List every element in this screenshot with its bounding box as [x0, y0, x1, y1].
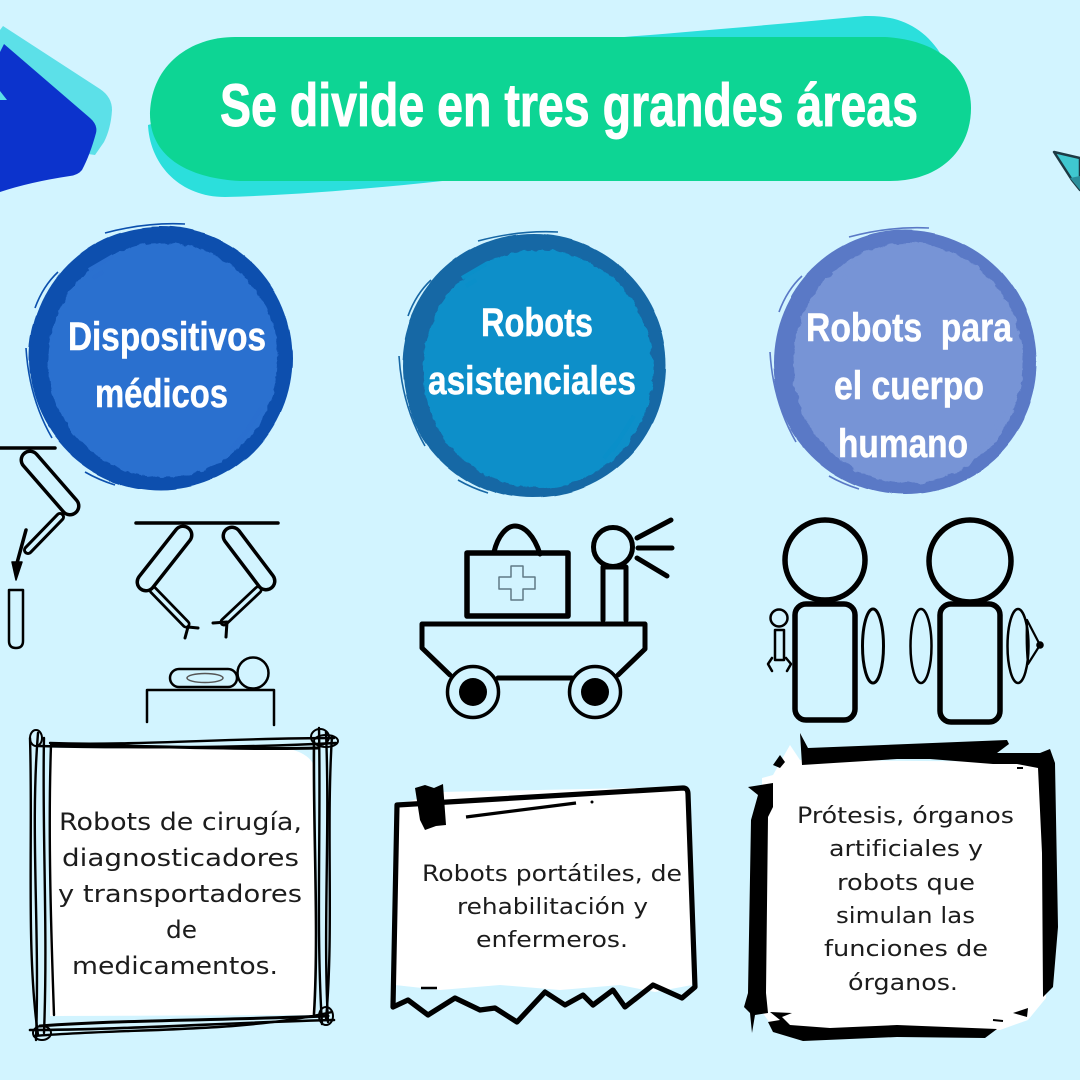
card: Robots asistenciales: rehabilitación y	[457, 894, 648, 920]
wheels	[448, 666, 620, 718]
label: Dispositivos	[68, 315, 266, 359]
label: Robots	[481, 301, 593, 345]
icon: assistance robot cart	[422, 520, 672, 718]
circle: Robots asistenciales	[399, 232, 666, 498]
circle: Dispositivos médicos	[26, 224, 293, 490]
card text: Robots de cirugía,	[59, 808, 302, 836]
card: Prótesis y órganos: robots que	[837, 870, 975, 896]
card text: Prótesis, órganos	[797, 803, 1014, 829]
circle: Dispositivos médicos: médicos	[95, 372, 228, 416]
card: Prótesis y órganos: órganos.	[848, 970, 958, 996]
card: Dispositivos médicos: y transportadores	[58, 880, 302, 908]
card: Prótesis y órganos: simulan las	[836, 903, 975, 929]
card: Dispositivos médicos: de	[166, 916, 197, 944]
circle: Robots para el cuerpo humano: humano	[838, 422, 968, 466]
card: Dispositivos médicos: diagnosticadores	[62, 844, 299, 872]
circle: Robots para el cuerpo humano: el cuerpo	[834, 364, 984, 408]
card: Dispositivos médicos	[30, 728, 338, 1040]
decorative shape: top-left blue arrow	[0, 26, 112, 192]
title banner	[148, 16, 971, 197]
decorative shape: right-edge arrow	[1054, 152, 1080, 190]
card: Prótesis y órganos: artificiales y	[829, 836, 983, 862]
card text: Robots portátiles, de	[422, 861, 682, 887]
icon: figure with prosthetic hand	[768, 520, 884, 720]
card: Dispositivos médicos: medicamentos.	[72, 952, 278, 980]
circle: Robots para el cuerpo humano	[770, 228, 1037, 494]
card: Prótesis y órganos: funciones de	[824, 936, 988, 962]
patient on table	[147, 658, 274, 725]
card: Robots asistenciales	[393, 784, 695, 1022]
icon: diagnostic robot arm with test tube	[0, 448, 70, 648]
card: Prótesis y órganos	[744, 733, 1058, 1041]
circle: Robots asistenciales: asistenciales	[428, 359, 636, 403]
icon: surgical robot arms over patient	[136, 523, 278, 725]
label: Robots para	[806, 306, 1013, 350]
card: Robots asistenciales: enfermeros.	[476, 927, 628, 953]
icon: figure with artificial organ	[910, 520, 1044, 722]
tape mark	[415, 784, 446, 830]
